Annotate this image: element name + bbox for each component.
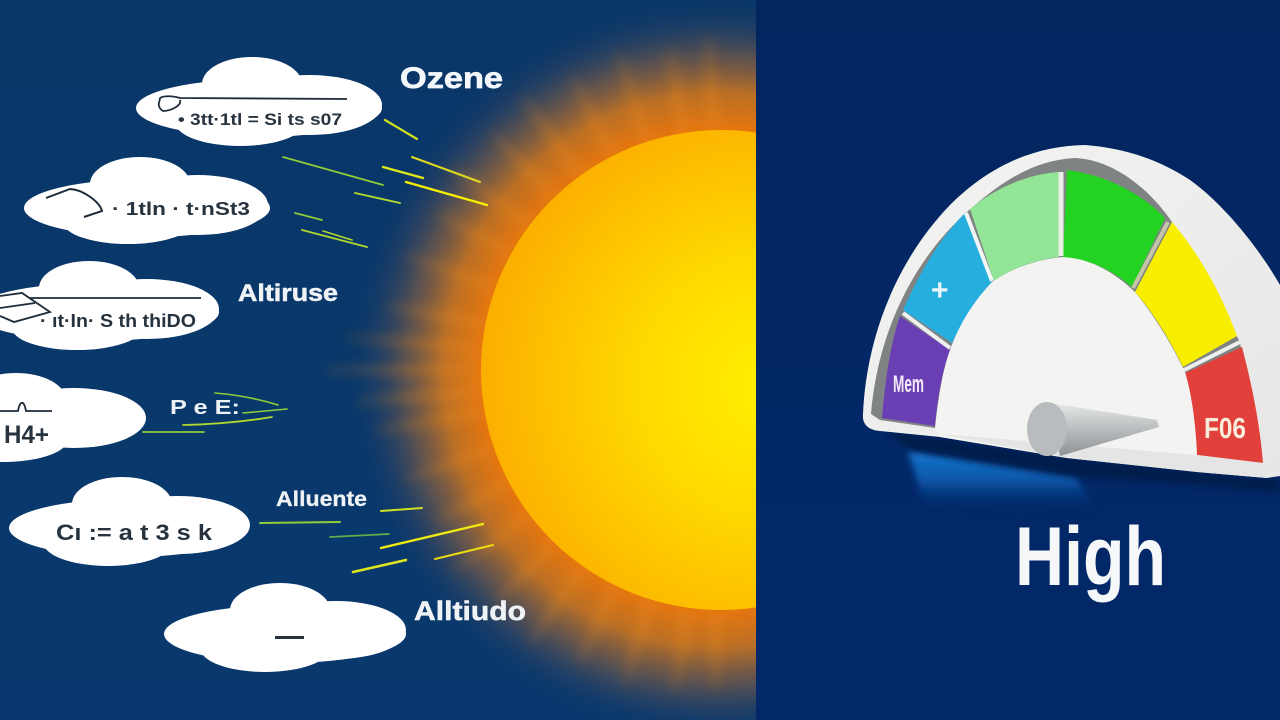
cloud sketch mark: [0, 293, 201, 322]
label: ozone: Ozene: [400, 62, 503, 95]
gauge segment: blue: [903, 213, 992, 343]
cloud sketch mark: [159, 96, 347, 111]
label: affluent: Alluente: [276, 488, 367, 511]
cloud sketch mark: [46, 189, 102, 217]
sun disc: [481, 130, 961, 610]
gauge segment: purple: [882, 316, 950, 426]
gauge segment dividers: [903, 172, 1240, 370]
cloud sketch mark: [0, 403, 52, 411]
cloud garbled text: • 3tt·1tl = Si ts s07: [178, 110, 342, 129]
arrows: upper radiation streaks: [283, 120, 487, 247]
gauge segment: green: [1063, 170, 1165, 287]
label: altitude lower: Alltiudo: [414, 596, 526, 626]
cloud garbled text: · 1tln · t·nSt3: [112, 199, 250, 219]
gauge segment: yellow: [1135, 222, 1237, 367]
label: short formula: P e E:: [170, 397, 240, 419]
cloud garbled text: Cı := a t 3 s k: [56, 520, 213, 545]
blue segment plus sign: +: [931, 274, 949, 307]
sun rays bright: [325, 35, 723, 693]
gauge inner dial: [935, 257, 1197, 458]
gauge segment: light green: [970, 172, 1059, 281]
cloud: fifth note: [9, 477, 250, 566]
sun with corona: [300, 0, 961, 720]
cloud: fourth note: [0, 373, 146, 462]
purple segment label: Mem: [893, 371, 924, 398]
gauge body: [863, 145, 1280, 478]
arrows: middle radiation streaks: [143, 393, 287, 432]
cloud: third note: [0, 261, 219, 350]
gauge inner grey rim: [871, 158, 1248, 430]
gauge segment: red: [1185, 347, 1263, 463]
cloud dash: [275, 636, 304, 639]
gauge needle: [1027, 402, 1159, 456]
gauge shadow and blue reflection: [885, 430, 1280, 512]
gauge meter: [863, 145, 1280, 478]
cloud: sixth note: [164, 583, 406, 672]
sun corona glow: [300, 0, 756, 720]
red segment label: F06: [1204, 413, 1246, 445]
label: high reading: High: [1015, 510, 1166, 603]
cloud: second note: [24, 157, 270, 244]
arrows: lower radiation streaks: [260, 508, 493, 572]
label: altitude upper: Altiruse: [238, 280, 338, 307]
cloud garbled text: H4+: [4, 421, 49, 449]
cloud: first ozone note: [136, 57, 382, 146]
panel: right navy background: [756, 0, 1280, 720]
cloud garbled text: · ıt·In· S th thiDO: [40, 311, 196, 331]
gauge lower lip: [940, 434, 1267, 478]
panel: left sky background: [0, 0, 756, 720]
